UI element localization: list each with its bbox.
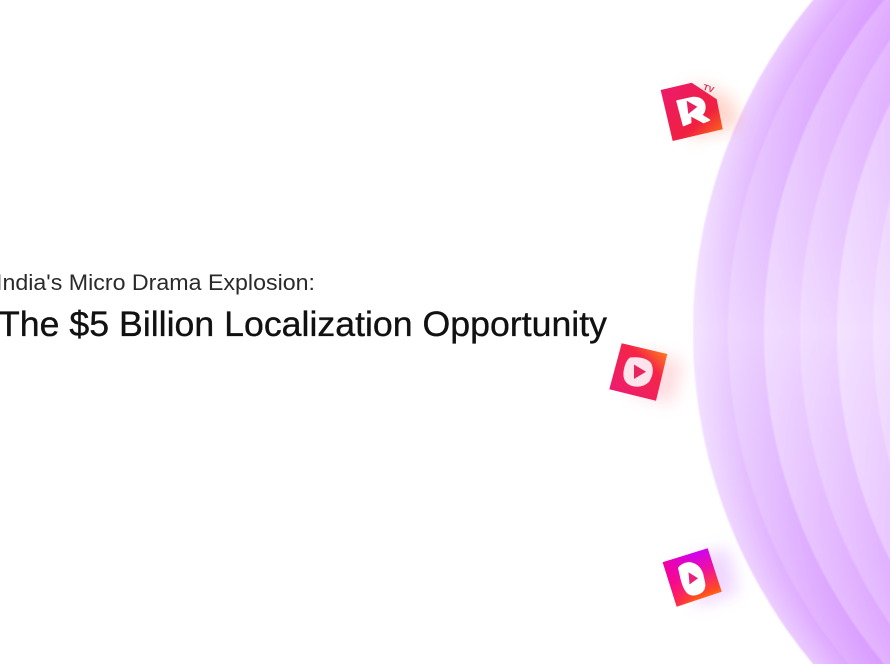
subtitle: India's Micro Drama Explosion: — [0, 270, 315, 295]
icon: D app pink — [609, 343, 684, 404]
icon: D app magenta — [663, 548, 738, 607]
title: The $5 Billion Localization Opportunity — [0, 305, 608, 344]
icon: R TV app: TV — [702, 82, 716, 95]
icon: R TV app — [661, 82, 740, 141]
concentric purple discs — [693, 0, 890, 664]
